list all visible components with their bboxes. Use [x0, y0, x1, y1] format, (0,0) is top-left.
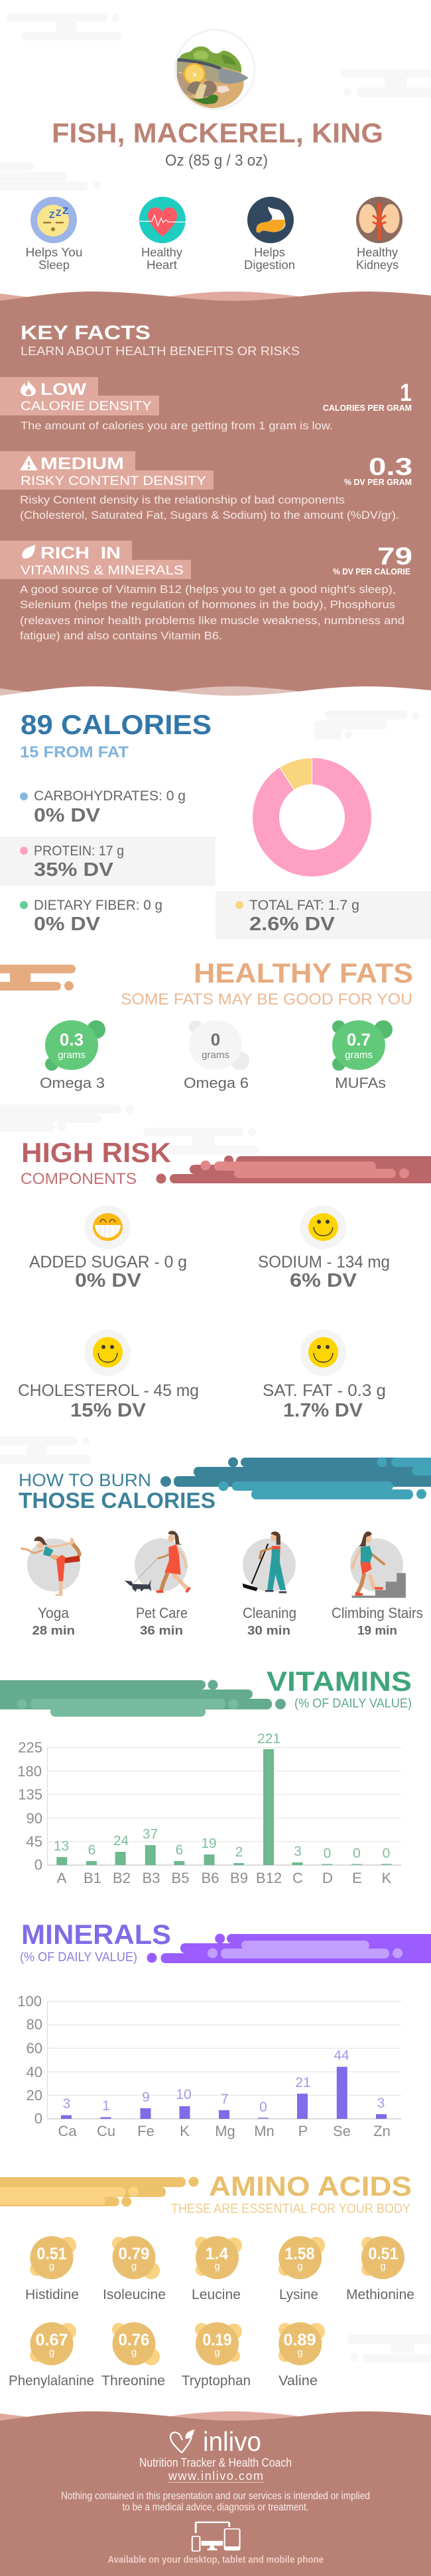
subheading: LEARN ABOUT HEALTH BENEFITS OR RISKS — [21, 344, 300, 358]
amino: leucine: 1.4 — [206, 2245, 228, 2263]
heading: healthy fats: HEALTHY FATS — [194, 957, 413, 989]
benefit: healthy heart — [139, 197, 186, 272]
amino: phenylalanine — [9, 2322, 94, 2388]
amino: leucine: g — [214, 2261, 220, 2272]
banner decoration — [156, 1155, 431, 1183]
bar chart: vitamins: 13 — [54, 1839, 69, 1854]
bar chart: minerals: 10 — [176, 2087, 192, 2102]
panel: minerals — [17, 1919, 431, 2139]
heading: high risk: HIGH RISK — [21, 1137, 171, 1168]
banner decoration — [147, 1933, 431, 1963]
amino: valine: g — [298, 2347, 303, 2358]
bar chart: vitamins: 45 — [27, 1833, 42, 1850]
stat: mufas: MUFAs — [335, 1075, 386, 1091]
fact: low calorie density — [0, 377, 412, 432]
subheading: THESE ARE ESSENTIAL FOR YOUR BODY — [171, 2202, 410, 2216]
availability note: Available on your desktop, tablet and mobile phone — [107, 2554, 324, 2565]
icon: devices — [192, 2522, 240, 2551]
bar chart: vitamins: 135 — [18, 1786, 42, 1803]
benefit: helps digestion: Helps — [254, 246, 285, 259]
bar chart: vitamins: B1 — [84, 1870, 101, 1886]
panel: how to burn those calories — [0, 1436, 431, 1637]
heading: minerals: MINERALS — [21, 1919, 171, 1950]
fact: rich in vitamins and minerals: Selenium (helps the regulation of hormones in the body), Phosphorus — [20, 598, 395, 611]
fact: rich in vitamins and minerals: VITAMINS & MINERALS — [21, 563, 184, 578]
figure: yoga pose — [21, 1536, 80, 1596]
bar chart: vitamins: B5 — [172, 1870, 189, 1886]
bar chart: vitamins: C — [292, 1870, 303, 1886]
bar chart: vitamins: 0 — [34, 1856, 42, 1873]
fact: medium risky content density: Risky Content density is the relationship of bad components — [20, 494, 345, 506]
bar chart: minerals: 80 — [27, 2016, 42, 2033]
subheading: from fat: 15 FROM FAT — [20, 743, 129, 761]
icon: grinning face — [84, 1206, 131, 1250]
heading: how to burn: HOW TO BURN — [19, 1470, 151, 1490]
amino: isoleucine — [103, 2236, 166, 2302]
banner decoration — [0, 965, 76, 991]
website link: www.inlivo.com — [168, 2469, 263, 2483]
bar chart: minerals: 0 — [259, 2100, 267, 2115]
amino: threonine: g — [131, 2347, 137, 2358]
row: dietary fiber: DIETARY FIBER: 0 g — [34, 898, 162, 913]
benefit: healthy kidneys: Kidneys — [356, 258, 399, 272]
fact: rich in vitamins and minerals — [0, 541, 412, 642]
row: total fat: 2.6% DV — [249, 914, 336, 935]
icon: sleeping face: Z — [56, 207, 62, 218]
bar chart: vitamins: B12 — [256, 1870, 282, 1886]
icon: stomach — [247, 197, 294, 243]
bar chart: vitamins: 221 — [257, 1731, 280, 1746]
bar chart: vitamins: E — [352, 1870, 362, 1886]
icon: smiley — [84, 1330, 131, 1376]
amino: isoleucine: Isoleucine — [103, 2287, 166, 2302]
amino: tryptophan — [182, 2322, 251, 2388]
stat: mufas — [332, 1020, 393, 1091]
bar chart: vitamins: 24 — [113, 1833, 129, 1849]
bar chart: minerals: Se — [333, 2123, 351, 2139]
header section — [27, 29, 402, 272]
amino: isoleucine: g — [131, 2261, 137, 2272]
stat: omega 3 — [40, 1020, 105, 1091]
icon: sleeping face: Z — [49, 209, 55, 220]
panel: footer — [0, 2412, 431, 2576]
bar chart: minerals: 9 — [142, 2090, 150, 2105]
bar chart: vitamins: 2 — [235, 1845, 243, 1860]
bar chart: vitamins: B3 — [143, 1870, 160, 1886]
icon: flame — [21, 380, 36, 396]
activity: climbing stairs: Climbing Stairs — [332, 1605, 423, 1621]
fact: medium risky content density — [0, 451, 412, 521]
amino: leucine — [192, 2236, 242, 2302]
row: protein: 35% DV — [34, 859, 114, 881]
activity: climbing stairs: 19 min — [357, 1624, 397, 1637]
benefit: healthy kidneys — [356, 197, 402, 272]
figure: woman sweeping — [243, 1532, 286, 1593]
cloud decoration — [143, 1128, 259, 1154]
icon: sleeping face — [31, 197, 77, 243]
activity: cleaning: 30 min — [247, 1624, 290, 1637]
cloud decoration — [347, 2334, 431, 2363]
amino: histidine — [25, 2236, 79, 2302]
bar chart: minerals: 7 — [221, 2092, 229, 2107]
panel: healthy fats — [0, 957, 413, 1091]
amino: histidine: 0.51 — [37, 2245, 67, 2263]
item: cholesterol: 15% DV — [70, 1400, 147, 1421]
item: saturated fat: SAT. FAT - 0.3 g — [263, 1381, 386, 1400]
fact: low calorie density: CALORIE DENSITY — [21, 399, 152, 413]
bar chart: vitamins: 6 — [176, 1843, 183, 1858]
bar chart: minerals: 0 — [34, 2110, 42, 2127]
stat: omega 6: 0 — [211, 1030, 220, 1049]
cloud decoration right — [341, 69, 431, 97]
bar chart: minerals: 40 — [27, 2064, 42, 2080]
fact: rich in vitamins and minerals: A good source of Vitamin B12 (helps you to get a good night's sleep), — [20, 583, 396, 596]
amino: methionine: Methionine — [346, 2287, 414, 2302]
bar chart: minerals: Cu — [97, 2123, 115, 2139]
amino: lysine: g — [298, 2261, 303, 2272]
item: cholesterol — [18, 1330, 199, 1421]
activity: pet care: 36 min — [140, 1624, 183, 1637]
row: protein — [0, 837, 216, 886]
banner decoration — [0, 1680, 286, 1717]
fact: medium risky content density: RISKY CONTENT DENSITY — [21, 474, 206, 488]
item: saturated fat — [263, 1330, 386, 1421]
benefit: helps you sleep — [25, 197, 82, 272]
icon: heart — [139, 197, 186, 243]
heading: vitamins: VITAMINS — [267, 1666, 412, 1697]
amino: valine: Valine — [278, 2373, 318, 2388]
fact: rich in vitamins and minerals: (releaves minor health problems like muscle weakness, numbness and — [20, 614, 404, 627]
bar chart: vitamins: K — [382, 1870, 392, 1886]
serving size: Oz (85 g / 3 oz) — [165, 152, 268, 170]
amino: lysine — [278, 2236, 325, 2302]
row: carbohydrates — [20, 788, 186, 826]
fact: rich in vitamins and minerals: RICH IN — [40, 544, 121, 563]
stat: mufas: 0.7 — [347, 1030, 371, 1049]
icon: smiley — [300, 1206, 346, 1250]
disclaimer: Nothing contained in this presentation and our services is intended or implied — [61, 2491, 370, 2502]
benefit: helps digestion — [244, 197, 295, 272]
banner decoration — [0, 2177, 199, 2206]
icon: kidneys — [356, 197, 402, 243]
bar chart: vitamins: A — [57, 1870, 67, 1886]
fact: medium risky content density: (Cholesterol, Saturated Fat, Sugars & Sodium) to the amount (%DV/gr). — [20, 509, 399, 521]
stat: omega 3: Omega 3 — [40, 1075, 105, 1091]
heading: key facts: KEY FACTS — [21, 322, 151, 344]
bar chart: vitamins: B6 — [202, 1870, 219, 1886]
amino: threonine: 0.76 — [118, 2331, 150, 2349]
item: added sugar: ADDED SUGAR - 0 g — [29, 1253, 187, 1271]
row: dietary fiber — [20, 898, 162, 935]
amino: phenylalanine: Phenylalanine — [9, 2373, 94, 2388]
bar chart: vitamins: 6 — [88, 1843, 95, 1858]
subheading: (% OF DAILY VALUE) — [20, 1951, 137, 1964]
amino: tryptophan: Tryptophan — [182, 2373, 251, 2388]
title: FISH, MACKEREL, KING — [52, 117, 383, 148]
logo: heart and leaf — [170, 2430, 194, 2453]
fact: medium risky content density: % DV PER GRAM — [344, 478, 412, 487]
bar chart: minerals: Zn — [373, 2123, 391, 2139]
bar chart: minerals: Mn — [254, 2123, 275, 2139]
benefit: healthy kidneys: Healthy — [357, 246, 398, 259]
benefit: healthy heart: Healthy — [141, 246, 182, 259]
figure: woman walking dog — [125, 1530, 191, 1593]
bar chart: vitamins: B9 — [230, 1870, 248, 1886]
bar chart: minerals: 44 — [334, 2048, 349, 2063]
icon: warning triangle — [20, 455, 38, 470]
bar chart: vitamins: 0 — [383, 1846, 390, 1861]
amino: methionine: 0.51 — [369, 2245, 399, 2263]
cloud decoration left — [0, 162, 101, 191]
stat: omega 6: grams — [202, 1049, 229, 1061]
amino: threonine — [101, 2322, 165, 2388]
heading: calories: 89 CALORIES — [21, 709, 212, 740]
row: total fat: TOTAL FAT: 1.7 g — [249, 898, 359, 913]
bar chart: minerals: Mg — [215, 2123, 235, 2139]
stat: omega 6 — [184, 1020, 249, 1091]
item: sodium: 6% DV — [290, 1270, 357, 1291]
row: carbohydrates: CARBOHYDRATES: 0 g — [34, 788, 186, 804]
benefit: helps digestion: Digestion — [244, 258, 295, 272]
disclaimer: to be a medical advice, diagnosis or treatment. — [122, 2502, 309, 2513]
bar chart: minerals: K — [180, 2123, 190, 2139]
bar chart: minerals: Ca — [58, 2123, 77, 2139]
stat: omega 6: Omega 6 — [184, 1075, 249, 1091]
amino: lysine: 1.58 — [285, 2245, 315, 2263]
fact: rich in vitamins and minerals: 79 — [377, 543, 412, 570]
amino: tryptophan: g — [214, 2347, 220, 2358]
row: total fat — [216, 891, 431, 939]
bar chart: vitamins: D — [322, 1870, 333, 1886]
bar chart: minerals: 3 — [63, 2096, 70, 2112]
bar chart: vitamins: 19 — [201, 1836, 217, 1851]
amino: histidine: Histidine — [25, 2287, 79, 2302]
icon: sleeping face: Z — [62, 205, 68, 217]
bar chart: vitamins: 3 — [294, 1844, 302, 1859]
amino: phenylalanine: g — [49, 2347, 54, 2358]
panel: vitamins — [0, 1666, 412, 1886]
tagline: Nutrition Tracker & Health Coach — [139, 2456, 292, 2469]
banner decoration — [160, 1458, 431, 1499]
icon: smiley — [300, 1330, 346, 1376]
amino: valine: 0.89 — [284, 2331, 316, 2349]
fact: low calorie density: LOW — [40, 380, 86, 399]
amino: tryptophan: 0.19 — [203, 2331, 232, 2349]
bar chart: vitamins: 90 — [27, 1810, 42, 1827]
bar chart: minerals: P — [298, 2123, 308, 2139]
bar chart: minerals: 1 — [102, 2098, 110, 2114]
disclaimer — [61, 2491, 370, 2513]
bar chart: minerals: 100 — [17, 1993, 42, 2010]
stat: omega 3: 0.3 — [60, 1030, 84, 1049]
fact: medium risky content density: MEDIUM — [40, 455, 124, 473]
icon: leaf — [22, 545, 35, 559]
activity: pet care — [125, 1530, 191, 1637]
heading: amino acids: AMINO ACIDS — [209, 2171, 412, 2202]
cloud decoration — [0, 1104, 135, 1132]
item: added sugar — [29, 1206, 187, 1291]
activity: climbing stairs — [332, 1531, 423, 1637]
amino: histidine: g — [49, 2261, 54, 2272]
bar chart: vitamins — [17, 1731, 401, 1886]
activity: yoga: 28 min — [32, 1624, 75, 1637]
activity: pet care: Pet Care — [136, 1605, 188, 1621]
activity: cleaning: Cleaning — [243, 1605, 296, 1621]
cloud decoration — [7, 13, 122, 40]
figure: woman climbing stairs — [352, 1531, 406, 1598]
bar chart: minerals: Fe — [137, 2123, 154, 2139]
amino: phenylalanine: 0.67 — [36, 2331, 68, 2349]
stat: omega 3: grams — [58, 1049, 86, 1061]
amino: lysine: Lysine — [279, 2287, 318, 2302]
amino: valine — [278, 2322, 325, 2388]
fact: medium risky content density: 0.3 — [369, 453, 412, 480]
row: dietary fiber: 0% DV — [34, 914, 101, 935]
bar chart: vitamins: B2 — [113, 1870, 131, 1886]
fact: rich in vitamins and minerals: fatigue) and also contains Vitamin B6. — [20, 629, 222, 642]
row: protein: PROTEIN: 17 g — [34, 843, 124, 859]
bar chart: minerals: 3 — [377, 2096, 385, 2111]
amino: methionine — [346, 2236, 414, 2302]
bar chart: vitamins: 225 — [18, 1739, 42, 1756]
activity: yoga — [21, 1536, 80, 1637]
cloud decoration — [0, 1436, 92, 1464]
item: cholesterol: CHOLESTEROL - 45 mg — [18, 1381, 199, 1400]
amino: leucine: Leucine — [192, 2287, 241, 2302]
donut chart — [266, 758, 358, 863]
subheading: components: COMPONENTS — [21, 1170, 137, 1188]
benefit: healthy heart: Heart — [147, 258, 177, 272]
logo wordmark: inlivo — [203, 2426, 261, 2457]
item: saturated fat: 1.7% DV — [283, 1400, 363, 1421]
item: sodium — [258, 1206, 390, 1291]
bar chart: vitamins: 37 — [143, 1827, 158, 1842]
benefit: helps you sleep: Sleep — [38, 258, 70, 272]
bar chart: minerals: 21 — [295, 2075, 311, 2090]
heading: those calories: THOSE CALORIES — [19, 1488, 216, 1513]
bar chart: vitamins: 0 — [324, 1846, 331, 1861]
fact: rich in vitamins and minerals: % DV PER CALORIE — [333, 567, 410, 576]
item: sodium: SODIUM - 134 mg — [258, 1253, 390, 1271]
fact: low calorie density: CALORIES PER GRAM — [323, 403, 412, 413]
bar chart: minerals: 20 — [27, 2087, 42, 2104]
bar chart: vitamins: 180 — [17, 1763, 42, 1780]
item: added sugar: 0% DV — [75, 1270, 142, 1291]
food photo: mackerel on a wooden board — [175, 30, 255, 109]
bar chart: minerals: 60 — [27, 2040, 42, 2057]
benefit: helps you sleep: Helps You — [25, 246, 82, 259]
fact: low calorie density: The amount of calories you are getting from 1 gram is low. — [21, 419, 333, 432]
bar chart: vitamins: 0 — [353, 1846, 361, 1861]
row: carbohydrates: 0% DV — [34, 805, 101, 826]
subheading: (% OF DAILY VALUE) — [294, 1697, 412, 1711]
amino: methionine: g — [380, 2261, 386, 2272]
subheading: SOME FATS MAY BE GOOD FOR YOU — [121, 991, 412, 1008]
cloud decoration — [314, 710, 420, 739]
panel: key facts — [0, 292, 431, 702]
stat: mufas: grams — [345, 1049, 373, 1061]
panel: high risk components — [0, 1104, 431, 1421]
activity: cleaning — [243, 1532, 296, 1637]
fact: low calorie density: 1 — [400, 379, 412, 406]
activity: yoga: Yoga — [38, 1605, 70, 1621]
panel: calories — [0, 709, 431, 939]
panel: amino acids — [0, 2171, 431, 2388]
amino: isoleucine: 0.79 — [118, 2245, 150, 2263]
bar chart: minerals — [17, 1993, 401, 2139]
amino: threonine: Threonine — [101, 2373, 165, 2388]
